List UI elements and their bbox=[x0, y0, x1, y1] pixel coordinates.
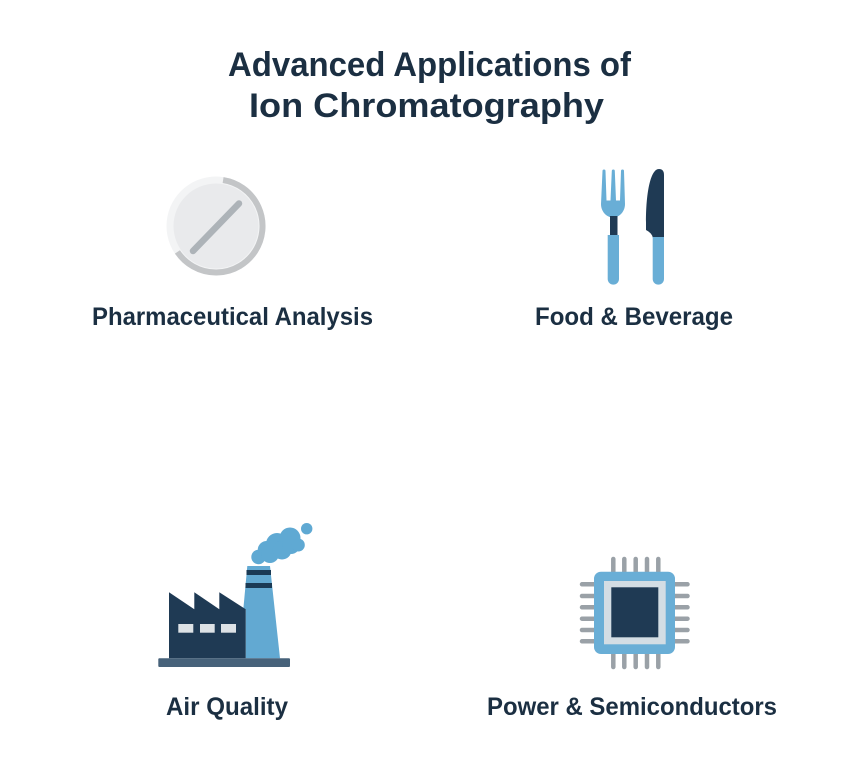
label: pharmaceutical analysis: Pharmaceutical Analysis bbox=[92, 303, 373, 331]
label: power and semiconductors: Power & Semiconductors bbox=[487, 693, 777, 721]
icon: microchip bbox=[582, 559, 688, 667]
label: food and beverage: Food & Beverage bbox=[535, 303, 733, 331]
icon: factory with smoke bbox=[158, 523, 312, 667]
icon: pill tablet bbox=[166, 176, 266, 276]
panel: food and beverage bbox=[535, 169, 733, 331]
panel: pharmaceutical analysis bbox=[92, 176, 373, 331]
panel: air quality bbox=[158, 523, 312, 721]
title: Ion Chromatography bbox=[249, 87, 604, 125]
panel: power and semiconductors bbox=[487, 559, 777, 721]
title bbox=[228, 46, 632, 125]
title: Advanced Applications of bbox=[228, 46, 632, 84]
label: air quality: Air Quality bbox=[166, 693, 288, 721]
icon: fork and knife bbox=[601, 169, 664, 285]
